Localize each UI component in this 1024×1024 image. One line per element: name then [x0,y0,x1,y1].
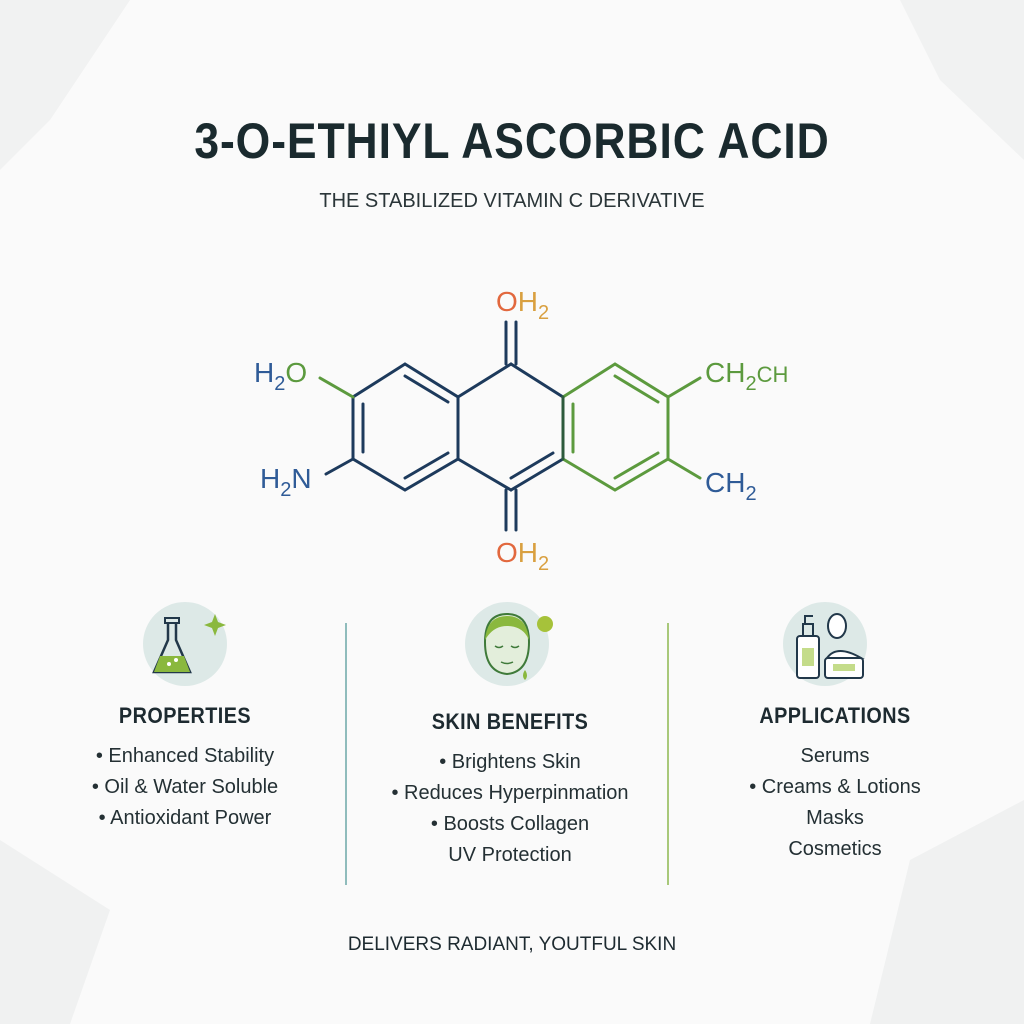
list: skin benefits [391,751,629,866]
heading: applications: APPLICATIONS [759,703,911,728]
list: applications: Serums [801,745,869,767]
list: skin benefits: • Reduces Hyperpinmation [391,782,629,804]
chemical structure: CH [705,467,745,498]
chemical structure: 2 [274,373,285,395]
heading: properties [92,703,278,829]
divider left [345,623,347,885]
chemical structure: 2 [280,479,291,501]
heading: skin benefits [391,709,629,866]
list: properties: • Oil & Water Soluble [92,776,278,798]
chemical structure: H [260,463,280,494]
divider right [667,623,669,885]
chemical structure: 2 [745,373,757,395]
icon: products [783,602,867,686]
list: properties [92,745,278,829]
subtitle: THE STABILIZED VITAMIN C DERIVATIVE [319,190,705,212]
chemical structure: CH [705,357,745,388]
chemical structure [254,286,788,575]
list: skin benefits: • Brightens Skin [439,751,581,773]
list: skin benefits: UV Protection [448,844,572,866]
heading: applications [749,703,921,860]
chemical structure: OH [496,537,538,568]
list: properties: • Antioxidant Power [99,807,271,829]
list: applications: • Creams & Lotions [749,776,921,798]
chemical structure: CH [757,362,788,387]
chemical structure: H [254,357,274,388]
list: applications: Cosmetics [788,838,882,860]
heading: skin benefits: SKIN BENEFITS [432,709,588,734]
list: applications [749,745,921,860]
chemical structure: 2 [745,483,757,505]
title: 3-O-ETHIYL ASCORBIC ACID [194,113,830,169]
chemical structure: N [291,463,312,494]
chemical structure: 2 [538,302,549,324]
chemical structure: 2 [538,553,549,575]
icon: flask [143,602,227,686]
list: properties: • Enhanced Stability [96,745,274,767]
list: applications: Masks [806,807,864,829]
chemical structure: O [285,357,307,388]
list: skin benefits: • Boosts Collagen [431,813,589,835]
footer tagline: DELIVERS RADIANT, YOUTFUL SKIN [348,934,676,955]
chemical structure: OH [496,286,538,317]
icon: face [465,602,549,686]
heading: properties: PROPERTIES [119,703,251,728]
